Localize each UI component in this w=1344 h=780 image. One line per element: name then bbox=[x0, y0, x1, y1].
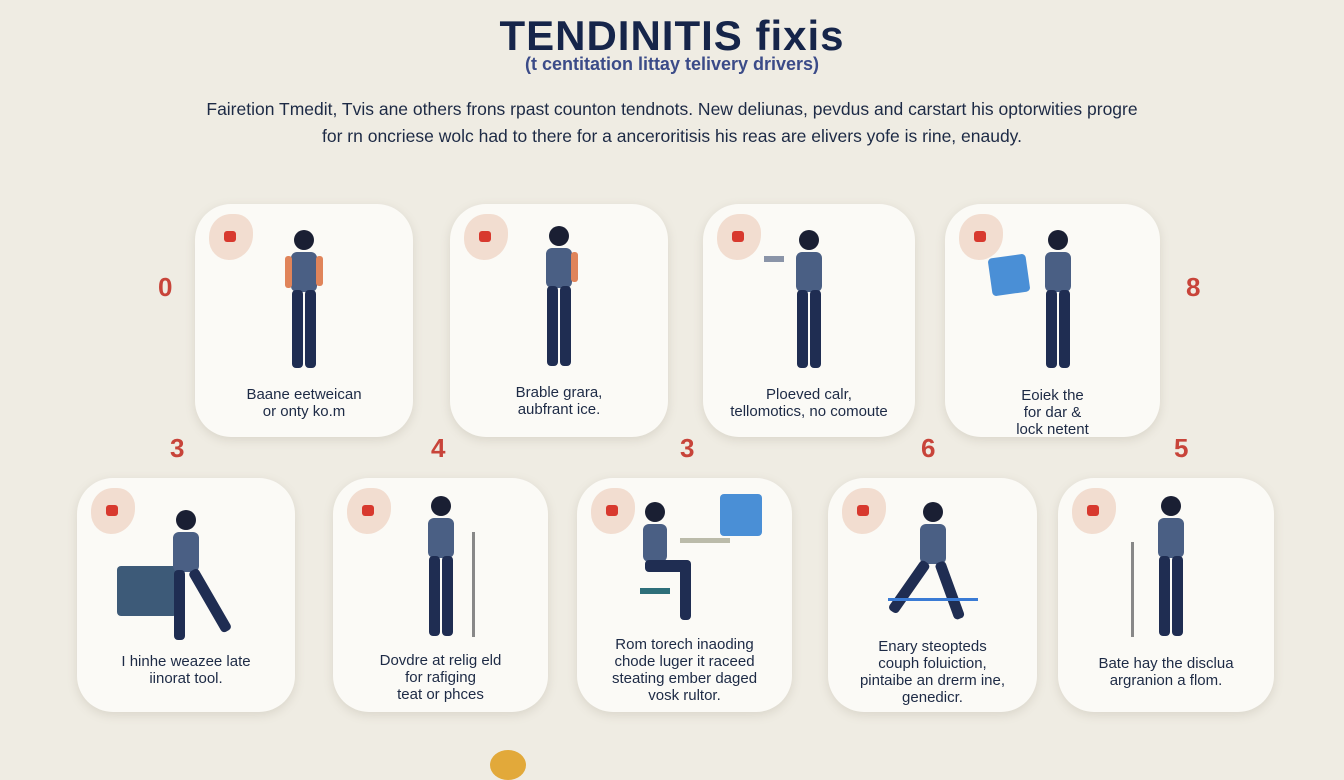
caption: Enary steopteds bbox=[878, 638, 987, 655]
caption bbox=[246, 386, 362, 420]
card 1 bbox=[195, 204, 413, 437]
card 3 bbox=[703, 204, 915, 437]
icon: machine bbox=[117, 566, 177, 616]
number 6: 6 bbox=[921, 433, 935, 463]
figure bbox=[285, 230, 323, 368]
caption: I hinhe weazee late bbox=[121, 653, 251, 670]
icon: tablet bbox=[988, 254, 1030, 296]
caption: teat or phces bbox=[397, 686, 484, 703]
icon: pain spot bbox=[717, 214, 761, 260]
card 2 bbox=[450, 204, 668, 437]
icon: pain spot bbox=[842, 488, 886, 534]
caption: Dovdre at relig eld bbox=[380, 652, 501, 669]
caption: tellomotics, no comoute bbox=[730, 403, 888, 420]
caption: Baane eetweican bbox=[246, 386, 362, 403]
subtitle: (t centitation littay telivery drivers) bbox=[525, 54, 819, 74]
icon: pain spot bbox=[209, 214, 253, 260]
caption: argranion a flom. bbox=[1110, 672, 1222, 689]
caption: chode luger it raceed bbox=[614, 653, 755, 670]
icon: pain spot bbox=[1072, 488, 1116, 534]
caption bbox=[1098, 655, 1234, 689]
number 3b: 3 bbox=[680, 433, 694, 463]
caption: or onty ko.m bbox=[263, 403, 345, 420]
icon: pain spot bbox=[464, 214, 508, 260]
caption bbox=[730, 386, 888, 420]
icon: pain spot bbox=[91, 488, 135, 534]
caption bbox=[612, 636, 757, 704]
card 5 bbox=[77, 478, 295, 712]
caption: couph foluiction, bbox=[878, 655, 987, 672]
caption: Ploeved calr, bbox=[766, 386, 852, 403]
caption bbox=[516, 384, 602, 418]
card 8 bbox=[828, 478, 1037, 712]
number 0: 0 bbox=[158, 272, 172, 302]
number 3: 3 bbox=[170, 433, 184, 463]
caption bbox=[860, 638, 1005, 706]
figure: seated bbox=[640, 502, 730, 620]
caption: for rafiging bbox=[405, 669, 476, 686]
title: TENDINITIS fixis bbox=[499, 12, 845, 59]
icon: pain spot bbox=[347, 488, 391, 534]
caption bbox=[380, 652, 501, 703]
figure bbox=[546, 226, 578, 366]
number 8: 8 bbox=[1186, 272, 1200, 302]
card 9 bbox=[1058, 478, 1274, 712]
caption: pintaibe an drerm ine, bbox=[860, 672, 1005, 689]
caption: genedicr. bbox=[902, 689, 963, 706]
intro text: Fairetion Tmedit, Tvis ane others frons rpast counton tendnots. New deliunas, pevdus and carstart his optorwities progre bbox=[206, 99, 1138, 119]
card 6 bbox=[333, 478, 548, 712]
caption: for dar & bbox=[1024, 404, 1081, 421]
icon: bottom ornament bbox=[490, 750, 526, 780]
caption bbox=[121, 653, 251, 687]
caption: Brable grara, bbox=[516, 384, 602, 401]
caption: Rom torech inaoding bbox=[615, 636, 754, 653]
card 7 bbox=[577, 478, 792, 712]
figure bbox=[764, 230, 822, 368]
number 4: 4 bbox=[431, 433, 445, 463]
figure bbox=[1045, 230, 1071, 368]
caption bbox=[1016, 387, 1089, 438]
icon: screen bbox=[720, 494, 762, 536]
figure bbox=[173, 510, 231, 640]
caption: steating ember daged bbox=[612, 670, 757, 687]
figure bbox=[428, 496, 475, 637]
caption: Bate hay the disclua bbox=[1098, 655, 1234, 672]
caption: lock netent bbox=[1016, 421, 1089, 438]
caption: aubfrant ice. bbox=[518, 401, 600, 418]
figure bbox=[1131, 496, 1184, 637]
intro text bbox=[206, 99, 1138, 146]
caption: iinorat tool. bbox=[149, 670, 223, 687]
figure: lunge bbox=[888, 502, 978, 620]
card 4 bbox=[945, 204, 1160, 437]
number 5: 5 bbox=[1174, 433, 1188, 463]
intro text: for rn oncriese wolc had to there for a anceroritisis his reas are elivers yofe is rine, enaudy. bbox=[322, 126, 1022, 146]
caption: Eoiek the bbox=[1021, 387, 1084, 404]
icon: pain spot bbox=[959, 214, 1003, 260]
icon: pain spot bbox=[591, 488, 635, 534]
caption: vosk rultor. bbox=[648, 687, 721, 704]
